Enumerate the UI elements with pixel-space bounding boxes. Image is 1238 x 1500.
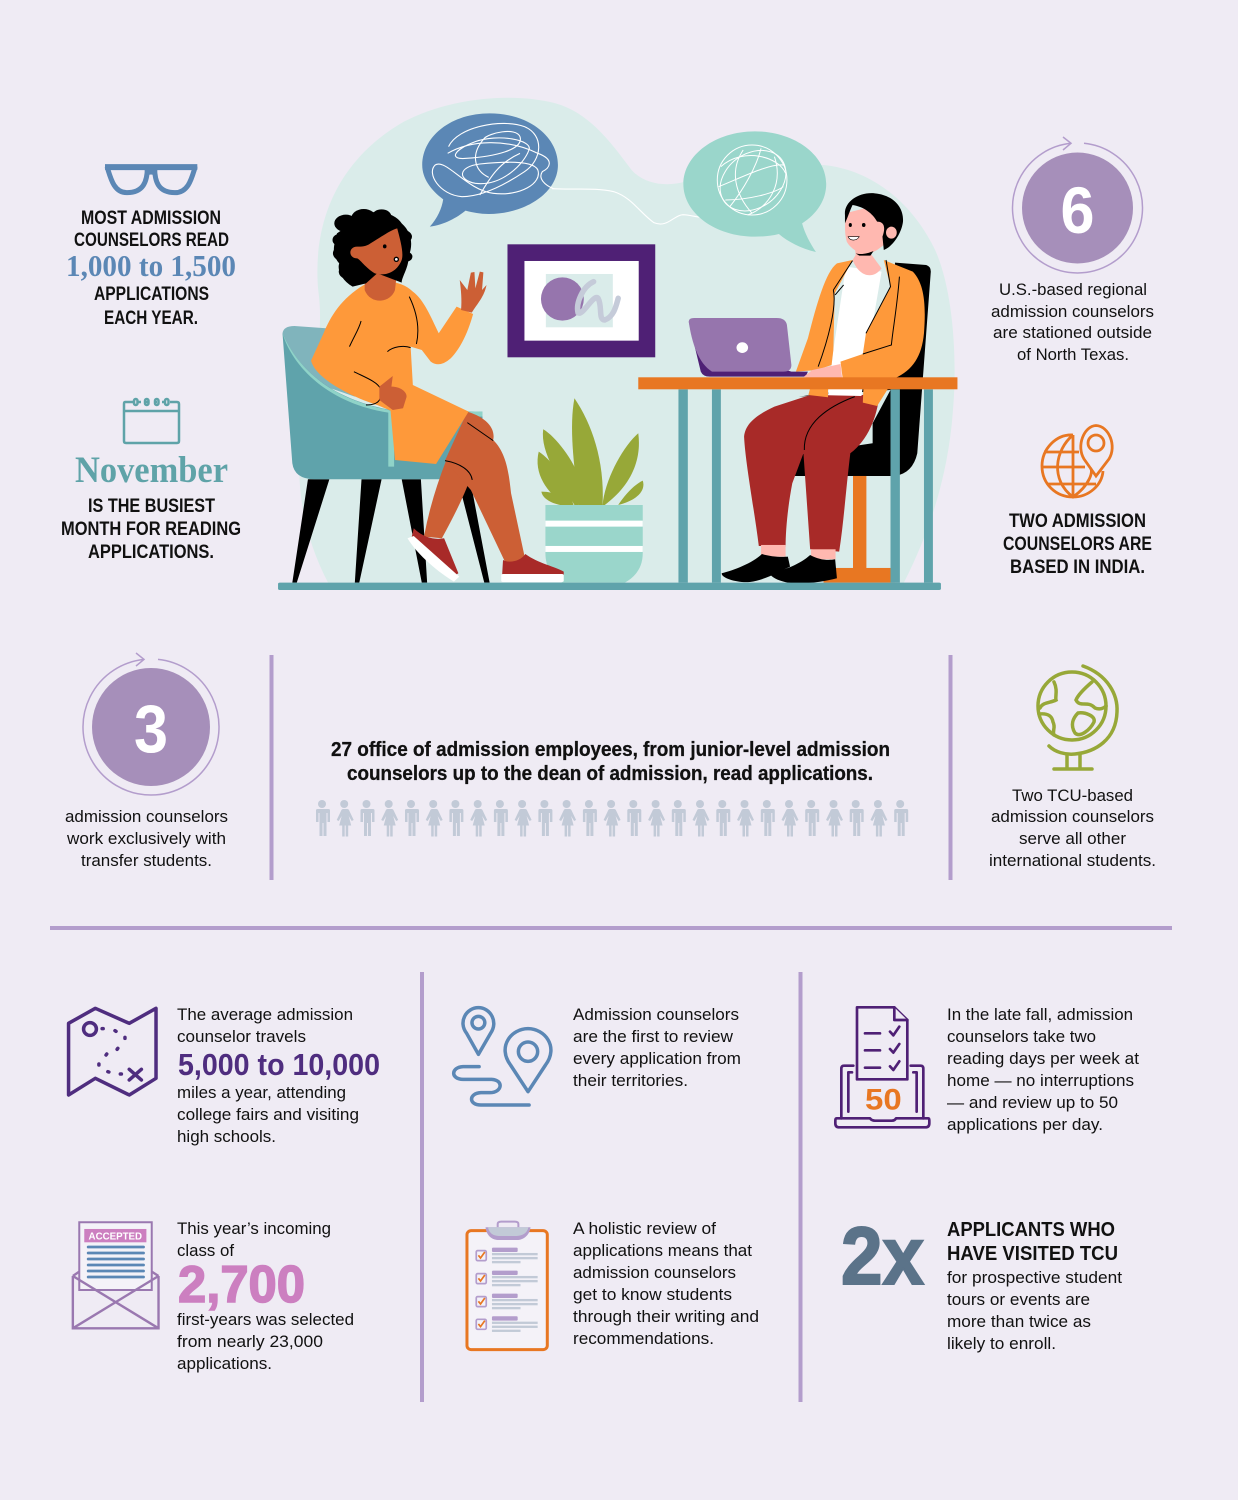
text: travels intro: The average admission [177,1005,353,1024]
text: two counselors in India: TWO ADMISSION [1009,511,1146,532]
panel: first to review: their territories. [573,1071,688,1090]
panel: six regional counselors [991,137,1154,364]
counselor: hand [804,364,842,381]
panel: incoming class [73,1219,354,1373]
panel: applications per year [66,167,236,329]
panel: transfer counselors: transfer students. [81,851,212,870]
panel: miles traveled: counselor travels [177,1027,306,1046]
chair left [282,326,490,583]
panel: reading days: counselors take two [947,1027,1096,1046]
student: dress [311,282,473,464]
panel: campus visitors: tours or events are [947,1290,1090,1309]
stat: 2,700: 2,700 [178,1256,305,1314]
speech bubble: tangled thoughts [422,113,558,227]
number circle: 3: 3 [134,691,168,767]
panel: holistic review: applications means that [573,1241,752,1260]
panel: miles traveled [69,1005,380,1146]
laptop [689,318,808,377]
panel: holistic review [467,1219,759,1350]
text: twice as likely to enroll: for prospective student [947,1268,1122,1287]
panel: holistic review: recommendations. [573,1329,714,1348]
panel: busiest month [61,399,241,563]
floor [278,583,941,590]
panel: international students [989,666,1156,870]
panel: six regional counselors: of North Texas. [1017,345,1129,364]
icon: ring with arrow [83,653,219,795]
icon: laptop with checklist and 50: 50 [865,1083,902,1116]
student: raised hand [460,272,487,313]
panel: international students: admission counselors [991,807,1154,826]
counselor: shoes [761,545,786,557]
thought line linking the bubbles [552,189,748,224]
text: holistic review: A holistic review of [573,1219,716,1238]
panel: counselors in India: COUNSELORS ARE [1003,534,1152,555]
panel: holistic review: through their writing and [573,1307,759,1326]
panel: applications per year: EACH YEAR. [104,308,198,329]
student: front leg and shoe [445,412,525,563]
number circle: 6 [1022,152,1133,264]
pictogram: 27 people [316,800,908,836]
panel: counselors in India [1003,426,1152,578]
divider: horizontal [50,926,1172,930]
panel: incoming class: from nearly 23,000 [177,1332,323,1351]
text: incoming class intro: This year’s incoming [177,1219,331,1238]
panel: first to review: every application from [573,1049,741,1068]
panel: miles traveled: high schools. [177,1127,276,1146]
panel: reading days: reading days per week at [947,1049,1139,1068]
number circle: 6: 6 [1060,173,1094,247]
divider: column two [798,972,802,1402]
panel: holistic review: get to know students [573,1285,732,1304]
text: reading days: In the late fall, admission [947,1005,1133,1024]
icon: laptop with checklist and 50 [835,1007,929,1127]
text: stationed outside North Texas: U.S.-based regional [999,280,1147,299]
panel: first to review [454,1005,741,1105]
icon: map pins and route [454,1008,551,1105]
heading: applicants who have visited TCU: APPLICANTS WHO [947,1219,1115,1241]
panel: reading days: home — no interruptions [947,1071,1134,1090]
panel: busiest month: APPLICATIONS. [88,542,214,563]
student: back leg and shoe [424,460,472,538]
student [311,209,564,582]
icon: calendar [124,399,179,443]
student: resting hand [379,376,407,410]
counselor: head [853,247,882,275]
panel: incoming class: class of [177,1241,234,1260]
panel: campus visitors: more than twice as [947,1312,1091,1331]
text: work with transfer students: admission counselors [65,807,228,826]
potted plant [538,398,643,583]
icon: ring with arrow [1013,137,1142,273]
text: most admission counselors read: MOST ADMISSION [81,208,221,229]
stat: 2x: 2x [841,1211,924,1302]
panel: holistic review: admission counselors [573,1263,736,1282]
panel: miles traveled: college fairs and visiting [177,1105,359,1124]
text: first-years selected: first-years was selected [177,1310,354,1329]
panel: transfer counselors: work exclusively with [66,829,226,848]
icon: acceptance letter [73,1222,159,1328]
panel: applications per year: COUNSELORS READ [74,230,229,251]
number circle: 3 [92,668,210,786]
panel: six regional counselors: are stationed outside [993,323,1152,342]
divider: right of employees panel [948,655,952,880]
panel: reading days [835,1005,1139,1134]
text: miles a year: miles a year, attending [177,1083,346,1102]
text: first to review: Admission counselors [573,1005,739,1024]
text: office employees read applications: 27 office of admission employees, from junior-level admission [331,739,890,761]
panel: reading days: applications per day. [947,1115,1103,1134]
desk [638,377,957,583]
icon: globe with pin [1042,426,1112,497]
text: busiest month for reading: IS THE BUSIEST [88,496,215,517]
stat: November: November [75,450,228,491]
speech bubble: round thoughts [683,131,826,252]
counselor: trousers [744,395,879,552]
panel: counselors in India: BASED IN INDIA. [1010,557,1145,578]
panel: 27 employees [316,739,908,836]
stat: 5,000 to 10,000: 5,000 to 10,000 [178,1047,380,1082]
framed art [507,244,655,357]
panel: 27 employees: counselors up to the dean of admission, read applications. [347,763,873,785]
background blob [299,98,955,583]
panel: campus visitors: likely to enroll. [947,1334,1056,1353]
panel: international students: international students. [989,851,1156,870]
divider: column one [420,972,424,1402]
panel: reading days: — and review up to 50 [947,1093,1118,1112]
counselor: shirt [828,267,882,396]
icon: glasses [105,167,197,193]
icon: desk globe [1038,666,1117,769]
panel: transfer counselors [65,653,228,870]
illustration: admission counselor meeting with a student [278,98,957,590]
panel: six regional counselors: admission counselors [991,302,1154,321]
student: neck and head [365,270,397,301]
text: applications each year: APPLICATIONS [94,284,209,305]
panel: incoming class: applications. [177,1354,272,1373]
divider: left of employees panel [270,655,274,880]
icon: treasure map [69,1008,156,1095]
panel: campus visitors: HAVE VISITED TCU [947,1243,1118,1265]
text: TCU-based counselors serve international students: Two TCU-based [1012,786,1133,805]
stat: 1,000 to 1,500: 1,000 to 1,500 [66,248,236,283]
counselor [722,193,925,583]
panel: campus visitors [841,1211,1122,1353]
office chair [783,263,931,583]
panel: international students: serve all other [1019,829,1126,848]
icon: clipboard checklist [467,1222,547,1350]
icon: acceptance letter: ACCEPTED [89,1232,142,1242]
panel: busiest month: MONTH FOR READING [61,519,241,540]
counselor: jacket [796,260,925,382]
panel: first to review: are the first to review [573,1027,734,1046]
